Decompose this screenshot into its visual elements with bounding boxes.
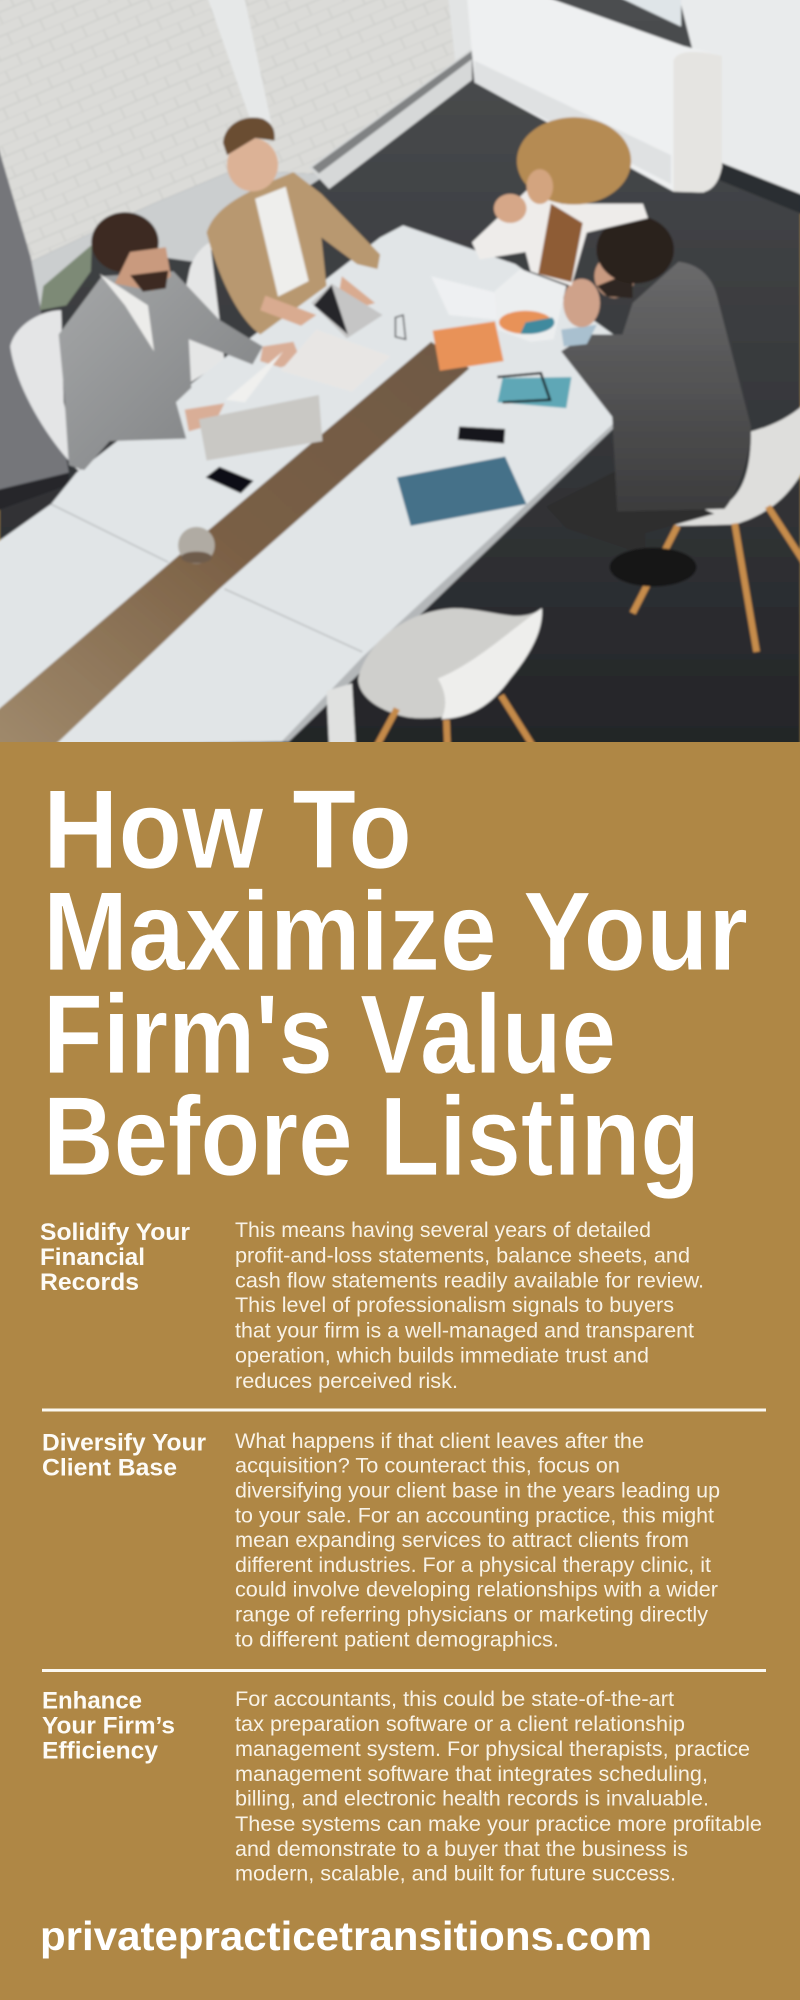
- section 1 heading: Financial: [40, 1244, 145, 1271]
- section 2 body text: could involve developing relationships with a wider: [235, 1579, 718, 1602]
- section 3 body text: tax preparation software or a client relationship: [235, 1713, 685, 1736]
- chair behind woman: [185, 243, 226, 383]
- laptop: [199, 395, 322, 460]
- section 3 heading: Enhance: [42, 1688, 142, 1714]
- section 3 body text: [235, 1688, 762, 1886]
- section 1 body text: profit-and-loss statements, balance sheets, and: [235, 1244, 690, 1268]
- section 1: solidify your financial records: [40, 1219, 704, 1393]
- table leg: [327, 683, 356, 746]
- man at right: [560, 218, 752, 588]
- section 2 body text: to your sale. For an accounting practice, this might: [235, 1504, 714, 1527]
- skirting board: [719, 162, 800, 216]
- section 3 body text: management system. For physical therapists, practice: [235, 1738, 750, 1761]
- section 1 body text: This level of professionalism signals to buyers: [235, 1294, 674, 1317]
- section 3 heading: Your Firm’s: [42, 1712, 175, 1740]
- report sheet with pie chart: [495, 269, 566, 342]
- title: Firm's Value: [43, 972, 616, 1097]
- air conditioning unit: [467, 0, 722, 192]
- section 2 body text: to different patient demographics.: [235, 1628, 559, 1652]
- footer website url: privatepracticetransitions.com: [40, 1913, 652, 1959]
- section 1 body text: that your firm is a well-managed and transparent: [235, 1320, 694, 1342]
- section 3 body text: and demonstrate to a buyer that the business is: [235, 1838, 688, 1861]
- phone left: [206, 467, 254, 493]
- section 3 body text: These systems can make your practice more profitable: [235, 1813, 762, 1836]
- wood runner: [0, 342, 469, 746]
- concrete column: [0, 136, 69, 511]
- window frame: [207, 0, 472, 124]
- section 2: diversify your client base: [42, 1430, 720, 1652]
- section 2 body text: diversifying your client base in the years leading up: [235, 1480, 720, 1503]
- blue clipboard: [397, 457, 527, 526]
- section 1 heading: [40, 1219, 190, 1296]
- section 2 body text: acquisition? To counteract this, focus on: [235, 1455, 620, 1478]
- photo: business meeting around a table: [0, 0, 800, 756]
- spiral notebook: [284, 351, 302, 366]
- section 3: enhance your firm's efficiency: [42, 1688, 762, 1886]
- orange folder: [433, 321, 504, 371]
- section 3 heading: [42, 1688, 175, 1764]
- section 3 heading: Efficiency: [42, 1738, 159, 1764]
- section 3 body text: billing, and electronic health records is invaluable.: [235, 1788, 709, 1811]
- tablet: [311, 284, 383, 338]
- section 1 heading: Records: [40, 1269, 139, 1296]
- title: How To: [43, 767, 412, 892]
- gold background panel: [0, 742, 800, 2000]
- section 2 body text: What happens if that client leaves after the: [235, 1430, 644, 1453]
- glasses on folder: [497, 373, 550, 402]
- paper sheet held by man: [226, 351, 283, 402]
- floor: [0, 0, 800, 756]
- section 2 body text: range of referring physicians or marketing directly: [235, 1604, 709, 1627]
- section 3 body text: For accountants, this could be state-of-the-art: [235, 1688, 674, 1711]
- title: Before Listing: [43, 1074, 700, 1199]
- section 1 heading: Solidify Your: [40, 1219, 190, 1246]
- section 1 body text: [235, 1219, 704, 1393]
- left chair: [10, 310, 81, 473]
- section 1 body text: reduces perceived risk.: [235, 1370, 458, 1393]
- section 2 body text: [235, 1430, 720, 1652]
- desk ornament sphere: [178, 527, 215, 564]
- right chair: [633, 402, 800, 652]
- section 3 body text: management software that integrates scheduling,: [235, 1763, 708, 1786]
- title: [43, 767, 748, 1199]
- woman with curly hair: [472, 117, 648, 286]
- section 2 body text: different industries. For a physical therapy clinic, it: [235, 1554, 711, 1577]
- section 1 body text: operation, which builds immediate trust and: [235, 1344, 649, 1368]
- teal folder: [497, 377, 571, 408]
- section 3 body text: modern, scalable, and built for future success.: [235, 1863, 676, 1886]
- section 2 heading: [42, 1430, 206, 1482]
- section 2 body text: mean expanding services to attract clients from: [235, 1529, 689, 1552]
- section 1 body text: This means having several years of detailed: [235, 1219, 651, 1242]
- table: [0, 225, 620, 746]
- bottom chair: [358, 608, 542, 746]
- man at left: [59, 212, 301, 470]
- title: Maximize Your: [43, 869, 748, 994]
- section 2 heading: Diversify Your: [42, 1430, 206, 1456]
- pavement outside the window: [0, 0, 474, 310]
- wall: [679, 0, 800, 199]
- section 2 heading: Client Base: [42, 1454, 177, 1482]
- eyeglasses on table: [395, 315, 406, 339]
- phone right: [458, 427, 505, 444]
- woman in tan blazer: [207, 118, 380, 334]
- section 1 body text: cash flow statements readily available for review.: [235, 1270, 704, 1292]
- plant: [40, 245, 92, 310]
- documents: [432, 278, 496, 319]
